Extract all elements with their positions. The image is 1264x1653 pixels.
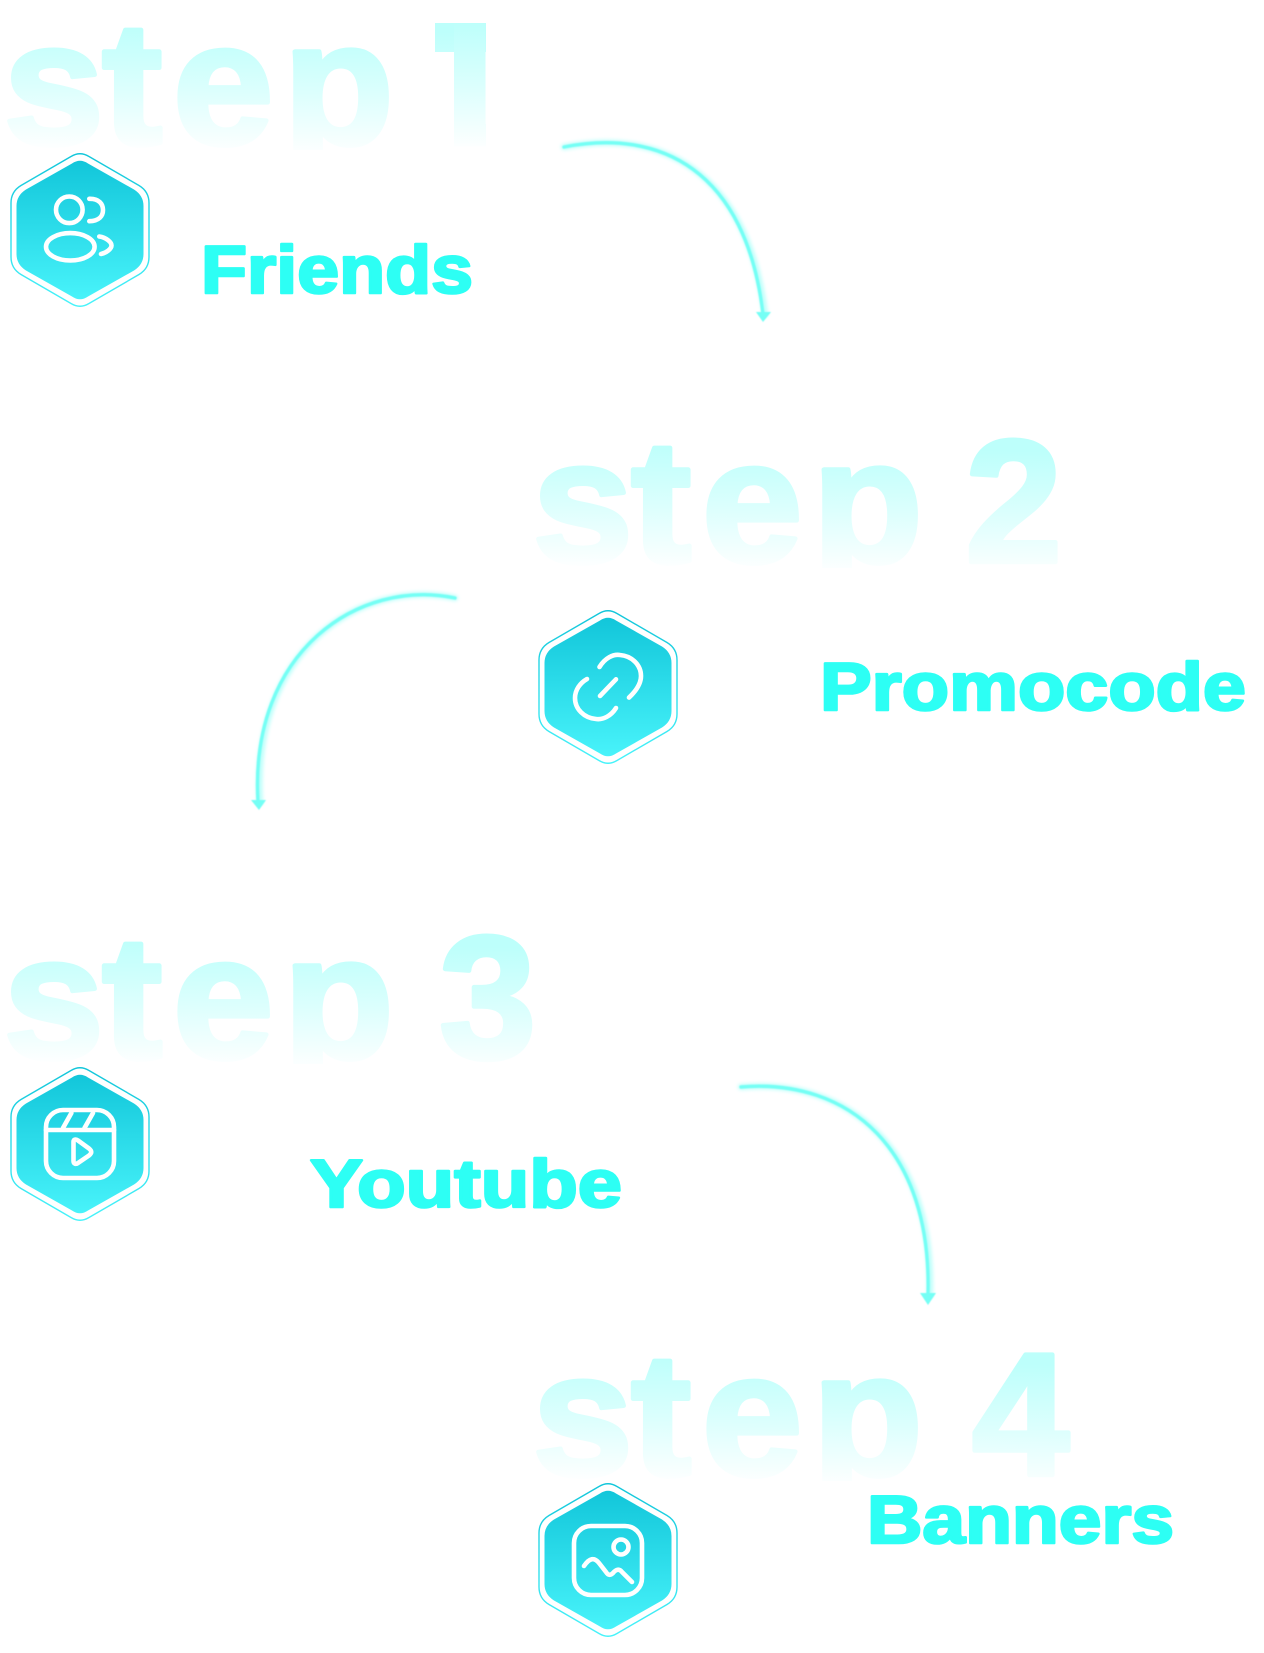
step 4 heading: 4 [972, 1318, 1069, 1513]
step 3 hexagon icon: video reel [11, 1068, 149, 1220]
step 2 label: Promocode [820, 649, 1246, 725]
step 1 hexagon icon: friends [11, 154, 149, 306]
step 4 hexagon icon: image [539, 1484, 677, 1636]
arrow 1 [564, 143, 771, 322]
arrow 2 [251, 595, 455, 810]
step 2 heading: 2 [965, 405, 1062, 600]
step 3 label: Youtube [310, 1146, 622, 1222]
step 4 heading [536, 1352, 1071, 1477]
step 1 heading [7, 23, 486, 144]
step 2 heading [536, 438, 1058, 564]
arrow 3 [741, 1086, 936, 1305]
step 4 label: Banners [867, 1482, 1174, 1558]
step 2 hexagon icon: link [539, 611, 677, 763]
step 3 heading: 3 [439, 901, 536, 1096]
step 2 heading: step [532, 403, 923, 599]
step 4 heading: step [532, 1316, 923, 1512]
step 1 label: Friends [201, 232, 473, 308]
step 3 heading: step [3, 899, 394, 1095]
step 3 heading [7, 934, 532, 1060]
